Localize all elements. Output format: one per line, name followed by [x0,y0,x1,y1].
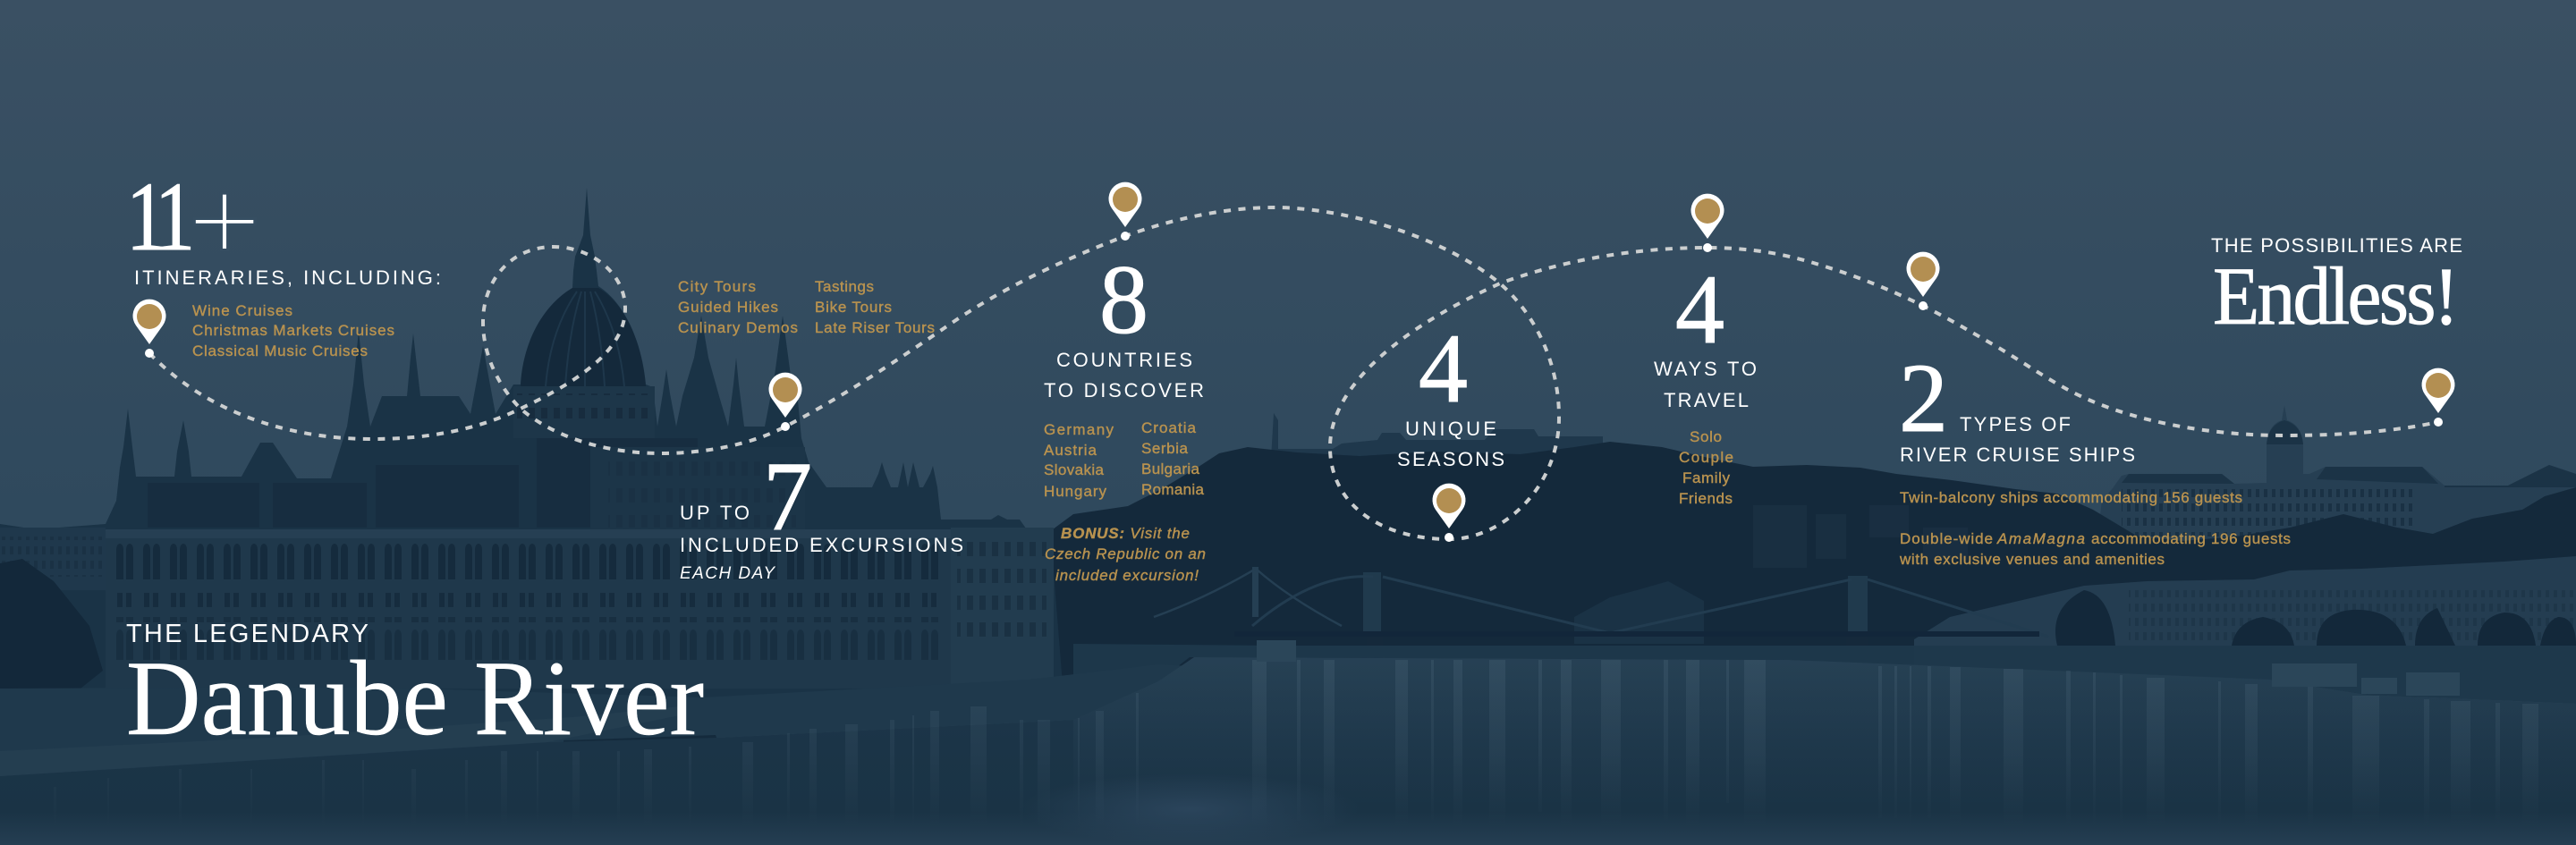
text: ship descriptions: Twin-balcony ships accommodating 156 guests [1900,489,2242,506]
list: countries: Germany [1044,421,1114,438]
list: countries: Serbia [1141,440,1189,457]
text: ship descriptions: accommodating 196 guests [2091,530,2291,547]
pin: countries [1109,182,1141,241]
Gellert and Buda hill forest [1029,442,2576,697]
title: the legendary Danube River: Danube River [126,638,704,757]
heading: itineraries including: ITINERARIES, INCLUDING: [134,266,441,289]
pin: excursions [769,373,801,431]
list: travel styles [1679,428,1733,507]
callout: bonus Czech Republic [1045,525,1206,584]
callout: bonus Czech Republic: BONUS: Visit the [1061,525,1190,542]
list: excursion types: Culinary Demos [678,319,798,336]
label: up to: UP TO [680,502,750,524]
list: excursion types: Tastings [815,278,874,295]
block: 2 types of ships [1899,343,2291,568]
Parliament building silhouette [0,188,1064,706]
castle hill palace [2093,405,2576,617]
title: the legendary Danube River: THE LEGENDARY [126,620,369,648]
closing: the possibilities are endless: Endless! [2213,251,2459,342]
label: types of river cruise ships [1900,413,2135,466]
list: countries: Croatia [1141,419,1197,436]
label: unique seasons: UNIQUE [1405,418,1496,440]
pin: itineraries [132,300,166,358]
stat: 8: 8 [1099,245,1148,354]
list: travel styles: Friends [1679,490,1733,507]
list: excursion types [678,278,935,336]
Elisabeth bridge [1154,567,1342,626]
Parliament embankment [0,664,1190,776]
list: excursion types: City Tours [678,278,756,295]
stat: 4 ways: 4 [1675,255,1724,364]
text: ship descriptions [1899,489,2291,568]
list: excursion types: Bike Tours [815,299,892,316]
citadel on Gellert hill [1270,413,1603,474]
block: 4 unique seasons [1397,314,1504,470]
label: countries to discover: COUNTRIES [1056,349,1192,371]
list: countries: Austria [1044,442,1097,459]
pin: ways to travel [1690,194,1724,252]
label: ways to travel: TRAVEL [1664,389,1749,411]
text: ship descriptions: Double-wide [1900,530,1993,547]
list: excursion types: Guided Hikes [678,299,778,316]
block: 11+ itineraries [126,155,441,359]
list: cruise themes [192,302,394,359]
Danube water [0,640,2576,845]
closing: the possibilities are endless: THE POSSIBILITIES ARE [2211,234,2462,257]
list: countries: Slovakia [1044,461,1105,478]
label: each day: EACH DAY [680,564,775,583]
pin: seasons [1433,484,1465,542]
list: travel styles: Couple [1679,449,1733,466]
list: cruise themes: Classical Music Cruises [192,342,368,359]
callout: bonus Czech Republic: Czech Republic on an [1045,545,1206,562]
block: 4 ways to travel [1654,255,1757,507]
text: ship descriptions: with exclusive venues and amenities [1899,551,2165,568]
list: countries [1044,419,1205,500]
stat: 7: 7 [763,442,812,551]
label: ways to travel [1654,358,1757,411]
list: countries: Hungary [1044,483,1107,500]
stat: 11+: 1 [126,162,166,271]
chain bridge [1234,572,2048,672]
stat: 11+: + [188,155,261,289]
pin: route end [2422,368,2454,427]
stat: 11+ [126,155,261,289]
list: cruise themes: Christmas Markets Cruises [192,322,394,339]
label: types of river cruise ships: RIVER CRUISE SHIPS [1900,444,2135,466]
stat: 2: 2 [1899,343,1948,452]
text: ship descriptions: AmaMagna [1996,530,2085,547]
list: cruise themes: Wine Cruises [192,302,292,319]
block: up to 7 included excursions [680,442,963,583]
list: travel styles: Family [1682,469,1730,486]
dashed river route line [149,207,2438,539]
pin: ship types [1907,252,1939,310]
label: types of river cruise ships: TYPES OF [1960,413,2071,435]
label: countries to discover: TO DISCOVER [1044,379,1204,401]
Buda river bank [1073,644,1914,720]
Pest embankment buildings [1574,556,2576,704]
list: travel styles: Solo [1690,428,1722,445]
stat: 11+: 1 [155,162,195,271]
label: unique seasons [1397,418,1504,470]
callout: bonus Czech Republic: included excursion! [1055,567,1199,584]
river boats [1257,640,2460,696]
label: included excursions: INCLUDED EXCURSIONS [680,534,963,556]
label: unique seasons: SEASONS [1397,448,1504,470]
label: ways to travel: WAYS TO [1654,358,1757,380]
stat: 4 seasons: 4 [1419,314,1468,423]
water reflections [54,660,2538,841]
block: 8 countries [1044,245,1206,584]
list: countries: Bulgaria [1141,461,1200,477]
label: countries to discover [1044,349,1204,401]
list: excursion types: Late Riser Tours [815,319,935,336]
list: countries: Romania [1141,481,1205,498]
